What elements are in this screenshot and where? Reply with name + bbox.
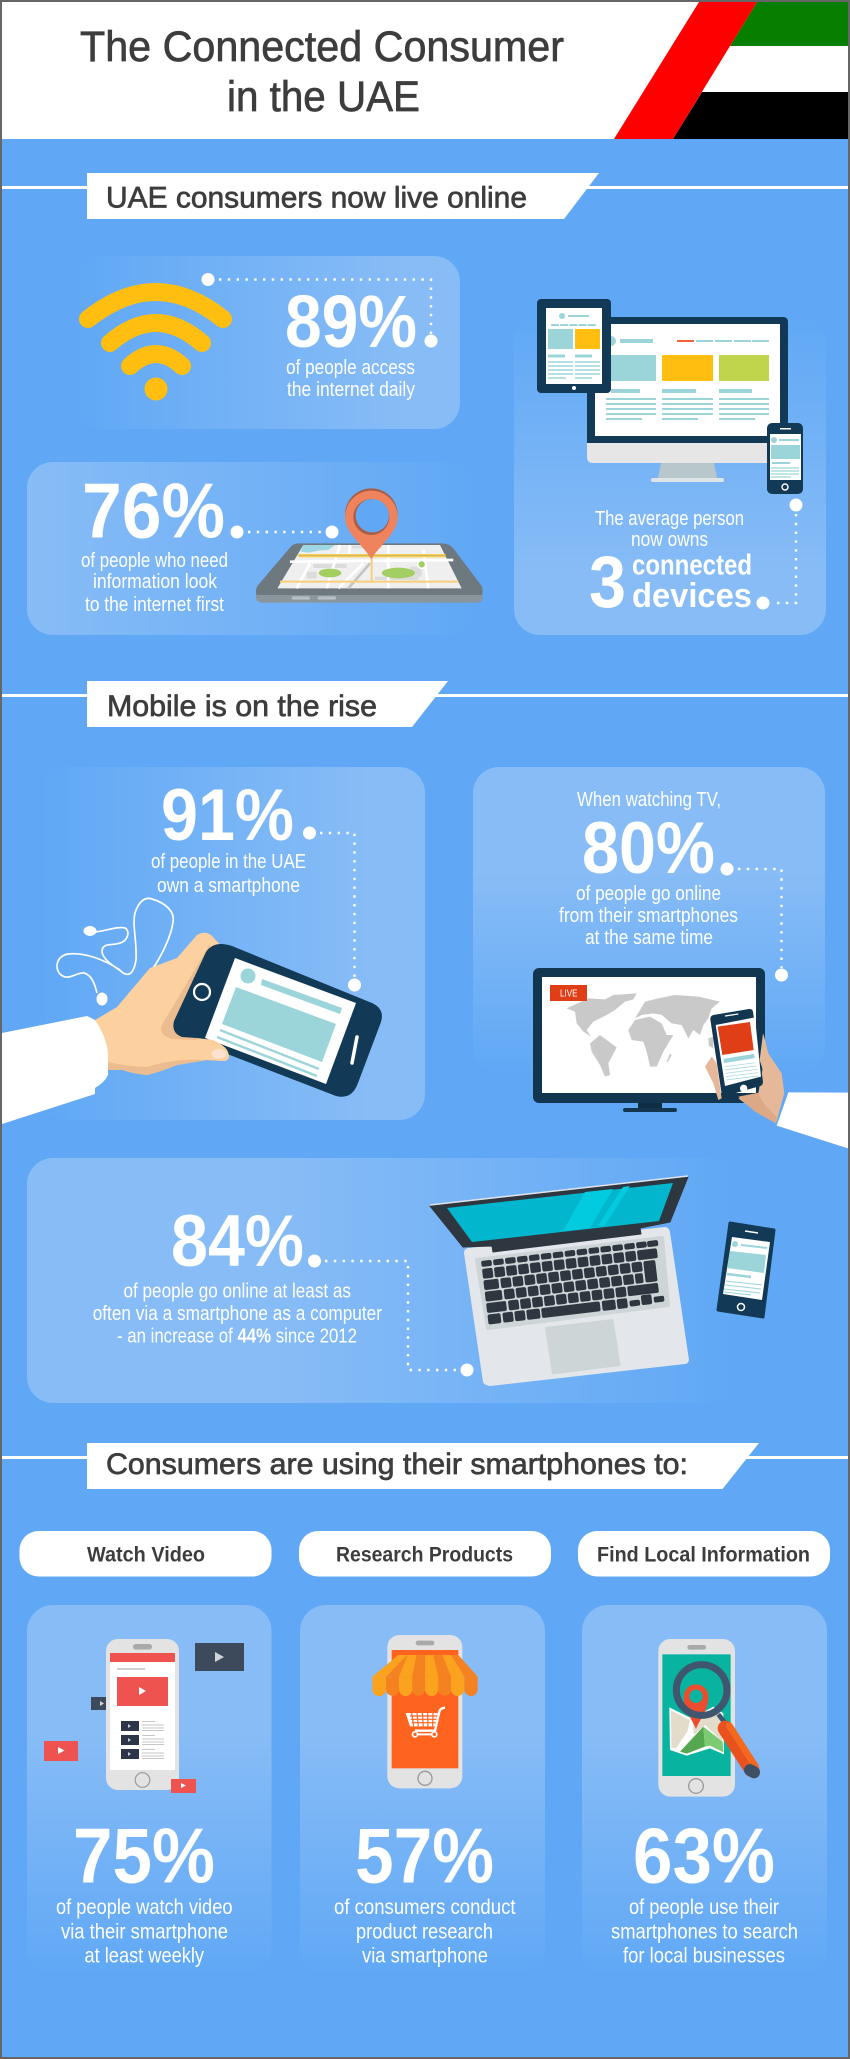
dotted connector [303,826,361,992]
caption: 76% [81,550,228,616]
icon: wifi [88,292,223,400]
caption: 91% [151,851,306,897]
panel: 80% while watching TV [473,767,850,1149]
caption: 80%: at the same time [585,927,713,949]
section heading: UAE consumers now live online [2,173,848,219]
panel: 76% internet first [27,462,483,635]
panel: 3 connected devices [514,299,826,635]
icon: television with world map [533,968,765,1112]
panel: 84% smartphone as often as computer [27,1158,774,1403]
dotted connector [230,526,338,538]
caption: 80% [559,883,738,949]
icon: earphones [57,898,173,1006]
caption: 84% [93,1280,382,1348]
caption: 75%: at least weekly [84,1944,204,1968]
pill: Watch Video: Watch Video [87,1544,205,1566]
section heading: Consumers are using their smartphones to [2,1443,848,1489]
pill: Research Products [299,1531,551,1576]
header banner [0,0,850,139]
UAE flag [614,2,850,139]
pill: Research Products: Research Products [336,1544,513,1566]
stat: 57%: 57% [355,1812,494,1900]
section heading: Mobile is on the rise: Mobile is on the rise [107,690,377,723]
stat: 75%: 75% [73,1812,215,1900]
caption: 89%: the internet daily [287,379,415,401]
caption: 76%: of people who need [81,550,228,572]
caption: 75% [56,1896,232,1968]
panel: 91% own a smartphone [2,767,425,1124]
caption: average person [595,508,744,551]
caption: 91%: own a smartphone [157,875,300,897]
icon: phone with map and magnifier [658,1639,756,1797]
caption: 75%: of people watch video [56,1896,232,1919]
pill: Find Local Information: Find Local Information [597,1544,810,1566]
caption: 80%: from their smartphones [559,905,738,927]
caption: average person: The average person [595,508,744,530]
caption: 89% [286,357,415,401]
caption: 84%: - an increase of 44% since 2012 [117,1326,357,1348]
LIVE label [550,985,587,1001]
caption: 63%: for local businesses [623,1944,785,1968]
stat: 3 connected devices: connected [632,550,752,582]
dotted connector [720,862,788,982]
stat: 3 connected devices [589,542,752,623]
caption: 63%: of people use their [629,1896,779,1919]
icon: phone with video [44,1639,244,1793]
title: in the UAE [227,73,420,121]
stat: 80%: 80% [582,808,715,889]
title: The Connected Consumer [80,23,564,71]
icon: hand holding phone at TV [705,1009,850,1149]
caption: 76%: information look [93,571,218,593]
stat: 3 connected devices: 3 [589,542,626,623]
icon: phone [767,423,803,494]
caption: 57%: via smartphone [362,1944,488,1968]
caption: 80%: of people go online [576,883,721,905]
dotted connector [202,273,438,348]
caption: 76%: to the internet first [85,594,224,616]
stat: 76%: 76% [82,466,225,554]
caption: 89%: of people access [286,357,415,379]
panel: 89% daily internet [75,256,460,429]
caption: 57% [334,1896,516,1968]
icon: phone beside laptop [718,1223,774,1317]
icon: tablet map with pin [256,488,483,603]
icon: hand holding phone [2,933,382,1124]
icon: laptop [430,1176,689,1386]
title [80,23,564,121]
caption: 75%: via their smartphone [61,1920,228,1944]
panel: watch video [27,1605,272,1975]
caption: 84%: of people go online at least as [124,1280,351,1302]
section heading: UAE consumers now live online: UAE consumers now live online [106,182,527,214]
pill: Find Local Information [578,1531,830,1576]
caption: 63% [611,1896,798,1968]
caption: average person: now owns [631,529,708,551]
panel: find local information [582,1605,827,1975]
caption: 57%: product research [356,1920,493,1944]
icon: phone with shop [372,1635,478,1788]
caption: 57%: of consumers conduct [334,1896,516,1919]
stat: 89%: 89% [285,280,417,363]
caption: 84%: often via a smartphone as a computer [93,1303,382,1325]
caption: 63%: smartphones to search [611,1920,798,1944]
stat: 3 connected devices: devices [632,577,752,615]
pill: Watch Video [20,1531,272,1576]
icon: tablet [537,299,611,393]
stat: 84%: 84% [171,1201,304,1282]
icon: desktop monitor [587,317,788,482]
caption: 91%: of people in the UAE [151,851,306,873]
LIVE label: LIVE [560,988,578,1000]
panel: research products [300,1605,545,1975]
dotted connector [756,498,802,610]
stat: 91%: 91% [161,775,294,856]
section heading: Consumers are using their smartphones to: Consumers are using their smartphones to: [106,1448,688,1481]
caption: when watching TV: When watching TV, [577,789,721,811]
dotted connector [308,1254,474,1376]
stat: 63%: 63% [633,1812,775,1900]
section heading: Mobile is on the rise [2,681,848,727]
